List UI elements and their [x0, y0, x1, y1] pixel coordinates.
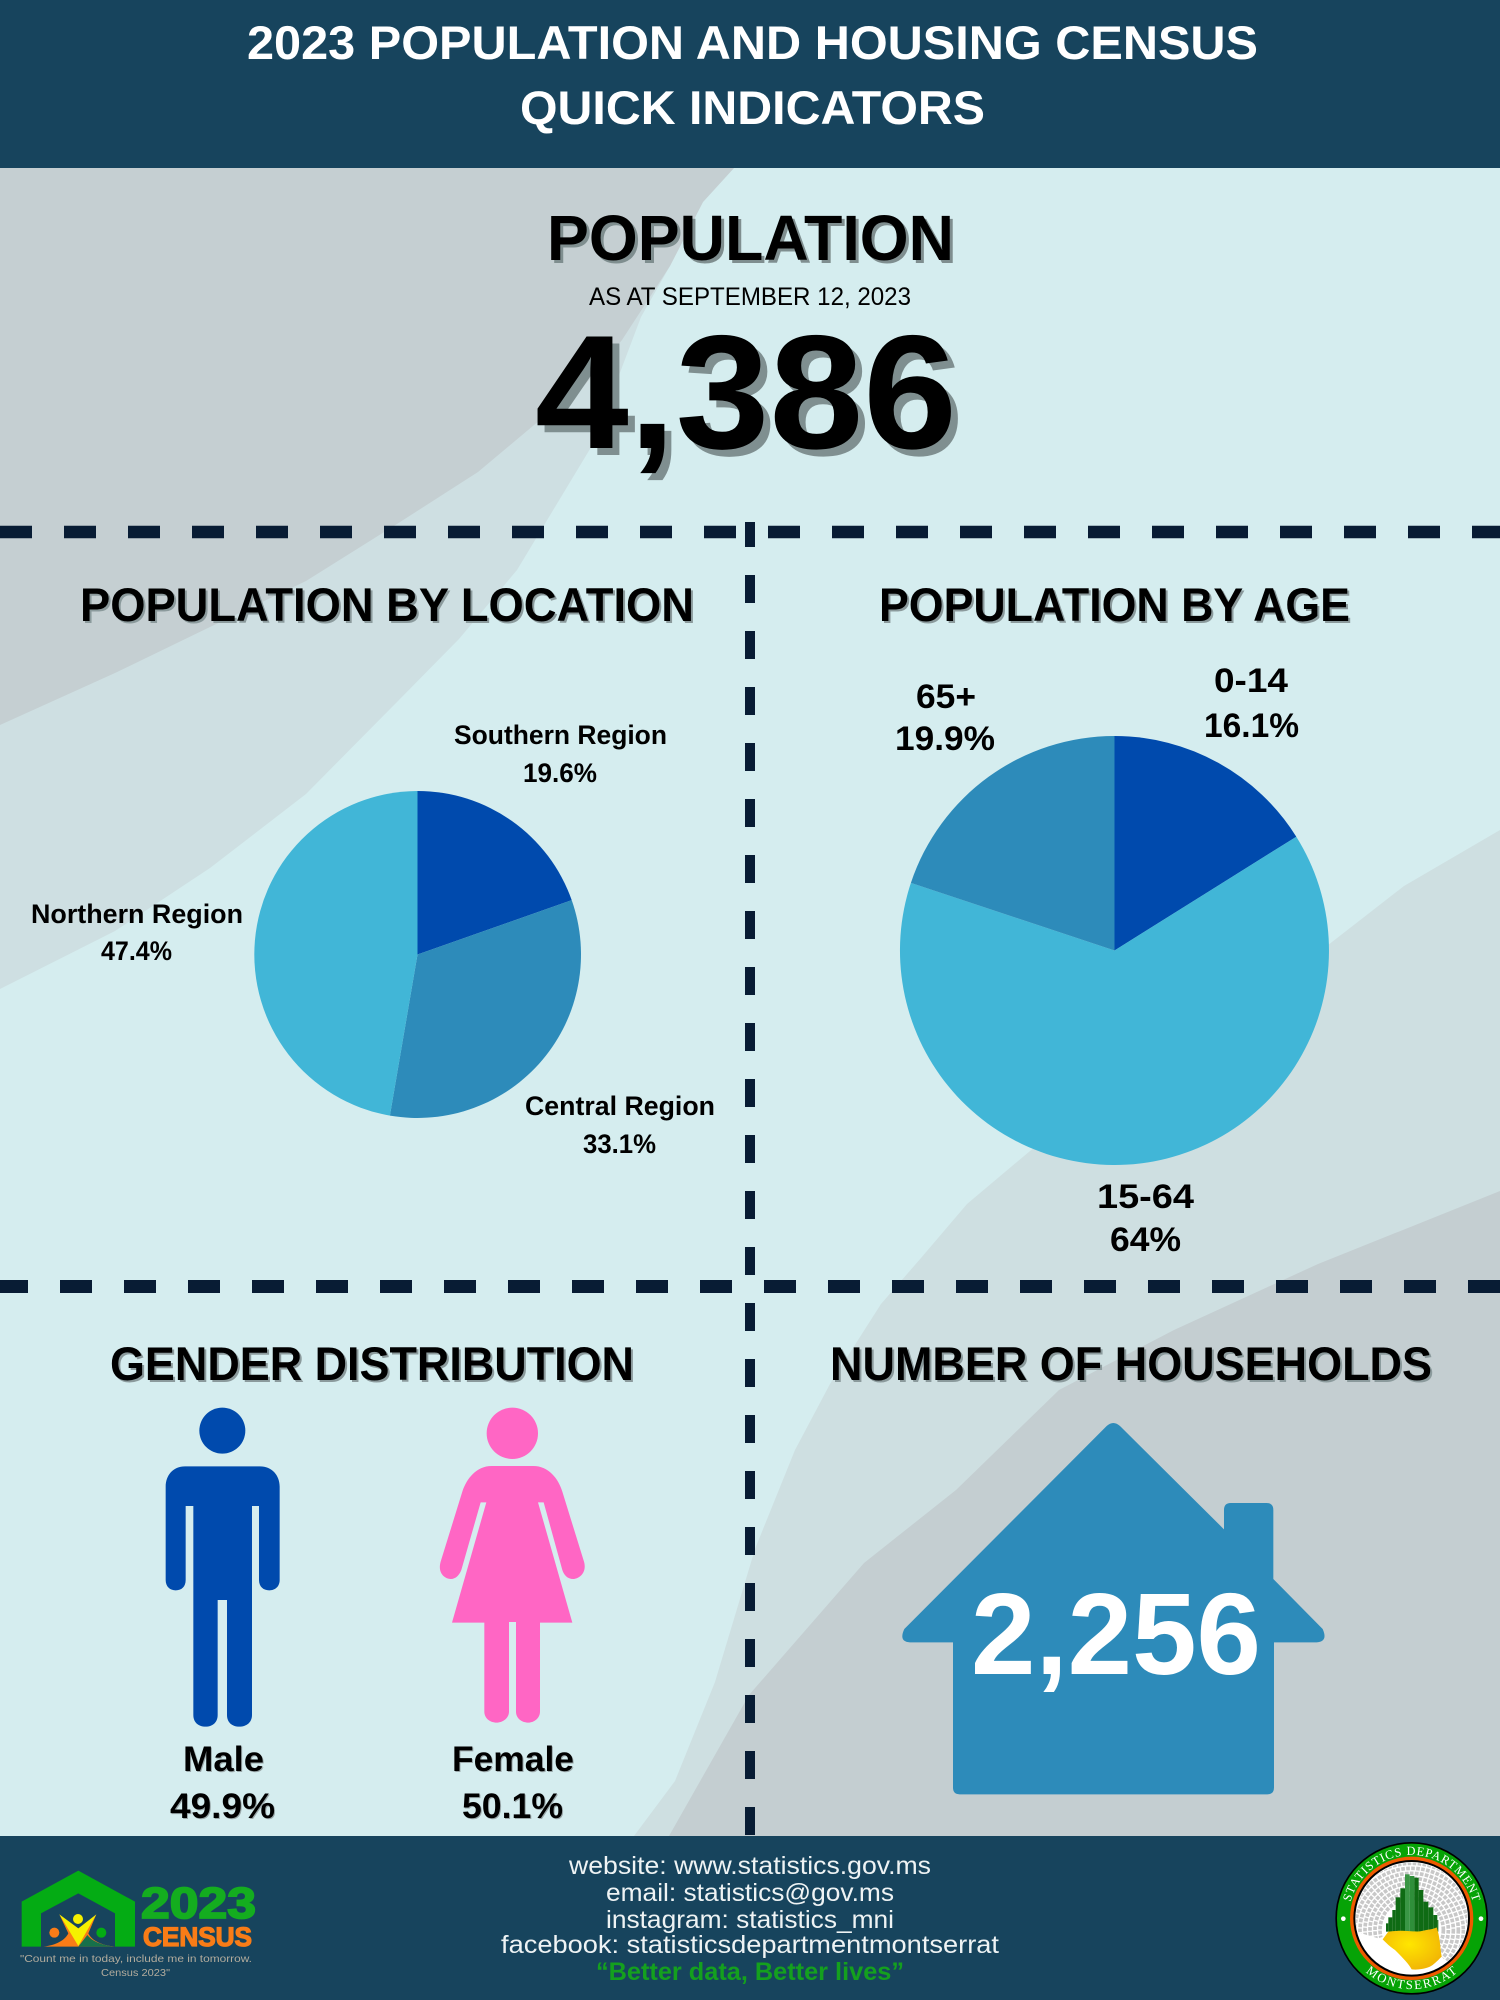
logo wordmark: 2023 [141, 1879, 256, 1928]
label: female share [452, 1740, 574, 1826]
label: 65+: 19.9% [895, 720, 995, 758]
census 2023 logo [20, 1871, 256, 1979]
label: male share: Male [183, 1740, 264, 1779]
label: central region: 33.1% [583, 1129, 656, 1159]
icon: census house [22, 1871, 135, 1947]
label: 65+: 65+ [916, 678, 976, 716]
households number: 2,256 [971, 1569, 1261, 1699]
icon: house [902, 1423, 1325, 1794]
label: 0-14: 16.1% [1204, 707, 1299, 745]
label: northern region: 47.4% [101, 936, 172, 966]
contact details [501, 1852, 999, 1959]
title: QUICK INDICATORS [520, 81, 985, 134]
contact details: facebook: statisticsdepartmentmontserrat [501, 1931, 999, 1959]
census 2023 logo: CENSUS [143, 1922, 252, 1952]
icon: female figure [440, 1408, 585, 1723]
seal lettering: MONTSERRAT [1366, 1966, 1456, 1990]
label: central region: Central Region [525, 1091, 715, 1121]
contact details: website: www.statistics.gov.ms [568, 1852, 931, 1880]
label: northern region [31, 899, 243, 966]
label: female share: Female [452, 1740, 574, 1779]
label: 15-64: 64% [1110, 1221, 1181, 1259]
label: female share: 50.1% [462, 1787, 563, 1826]
heading: number of households: NUMBER OF HOUSEHOLDS [830, 1337, 1432, 1390]
icon: male figure [166, 1408, 280, 1727]
panel: population by age [879, 578, 1350, 1259]
contact details: email: statistics@gov.ms [606, 1879, 894, 1907]
pie chart: location [254, 791, 581, 1118]
panel: population by location [31, 578, 715, 1159]
logo tagline [20, 1953, 252, 1979]
dashed dividers [0, 522, 1500, 1836]
panel: number of households [830, 1337, 1432, 1794]
pie chart: age [900, 736, 1329, 1165]
label: 65+ [895, 678, 995, 758]
label: southern region [454, 720, 667, 788]
panel: gender distribution [110, 1337, 634, 1826]
label: 15-64 [1097, 1178, 1194, 1259]
label: male share: 49.9% [170, 1787, 275, 1826]
title [247, 16, 1258, 134]
label: 0-14: 0-14 [1214, 662, 1288, 700]
heading: population by location: POPULATION BY LOCATION [80, 578, 694, 631]
label: southern region: Southern Region [454, 720, 667, 750]
logo tagline: "Count me in today, include me in tomorrow. [20, 1953, 252, 1965]
contact details: instagram: statistics_mni [606, 1906, 894, 1934]
label: southern region: 19.6% [523, 758, 597, 788]
label: central region [525, 1091, 715, 1159]
label: male share [170, 1740, 275, 1826]
panel: total population [535, 202, 957, 483]
label: northern region: Northern Region [31, 899, 243, 929]
title: 2023 POPULATION AND HOUSING CENSUS [247, 16, 1258, 69]
label: 15-64: 15-64 [1097, 1178, 1194, 1216]
date note: AS AT SEPTEMBER 12, 2023 [589, 283, 911, 311]
heading: population by age: POPULATION BY AGE [879, 578, 1350, 631]
seal lettering: STATISTICS DEPARTMENT [1343, 1846, 1481, 1902]
heading: population: POPULATION [547, 202, 954, 274]
slogan: “Better data, Better lives” [596, 1958, 904, 1986]
statistics department seal [1335, 1842, 1488, 1995]
seal lettering [1341, 1846, 1484, 1990]
label: 0-14 [1204, 662, 1299, 745]
heading: gender distribution: GENDER DISTRIBUTION [110, 1337, 634, 1390]
footer band [0, 1836, 1500, 2000]
header band [0, 0, 1500, 168]
logo tagline: Census 2023" [101, 1967, 170, 1979]
total population number: 4,386 [535, 302, 957, 483]
